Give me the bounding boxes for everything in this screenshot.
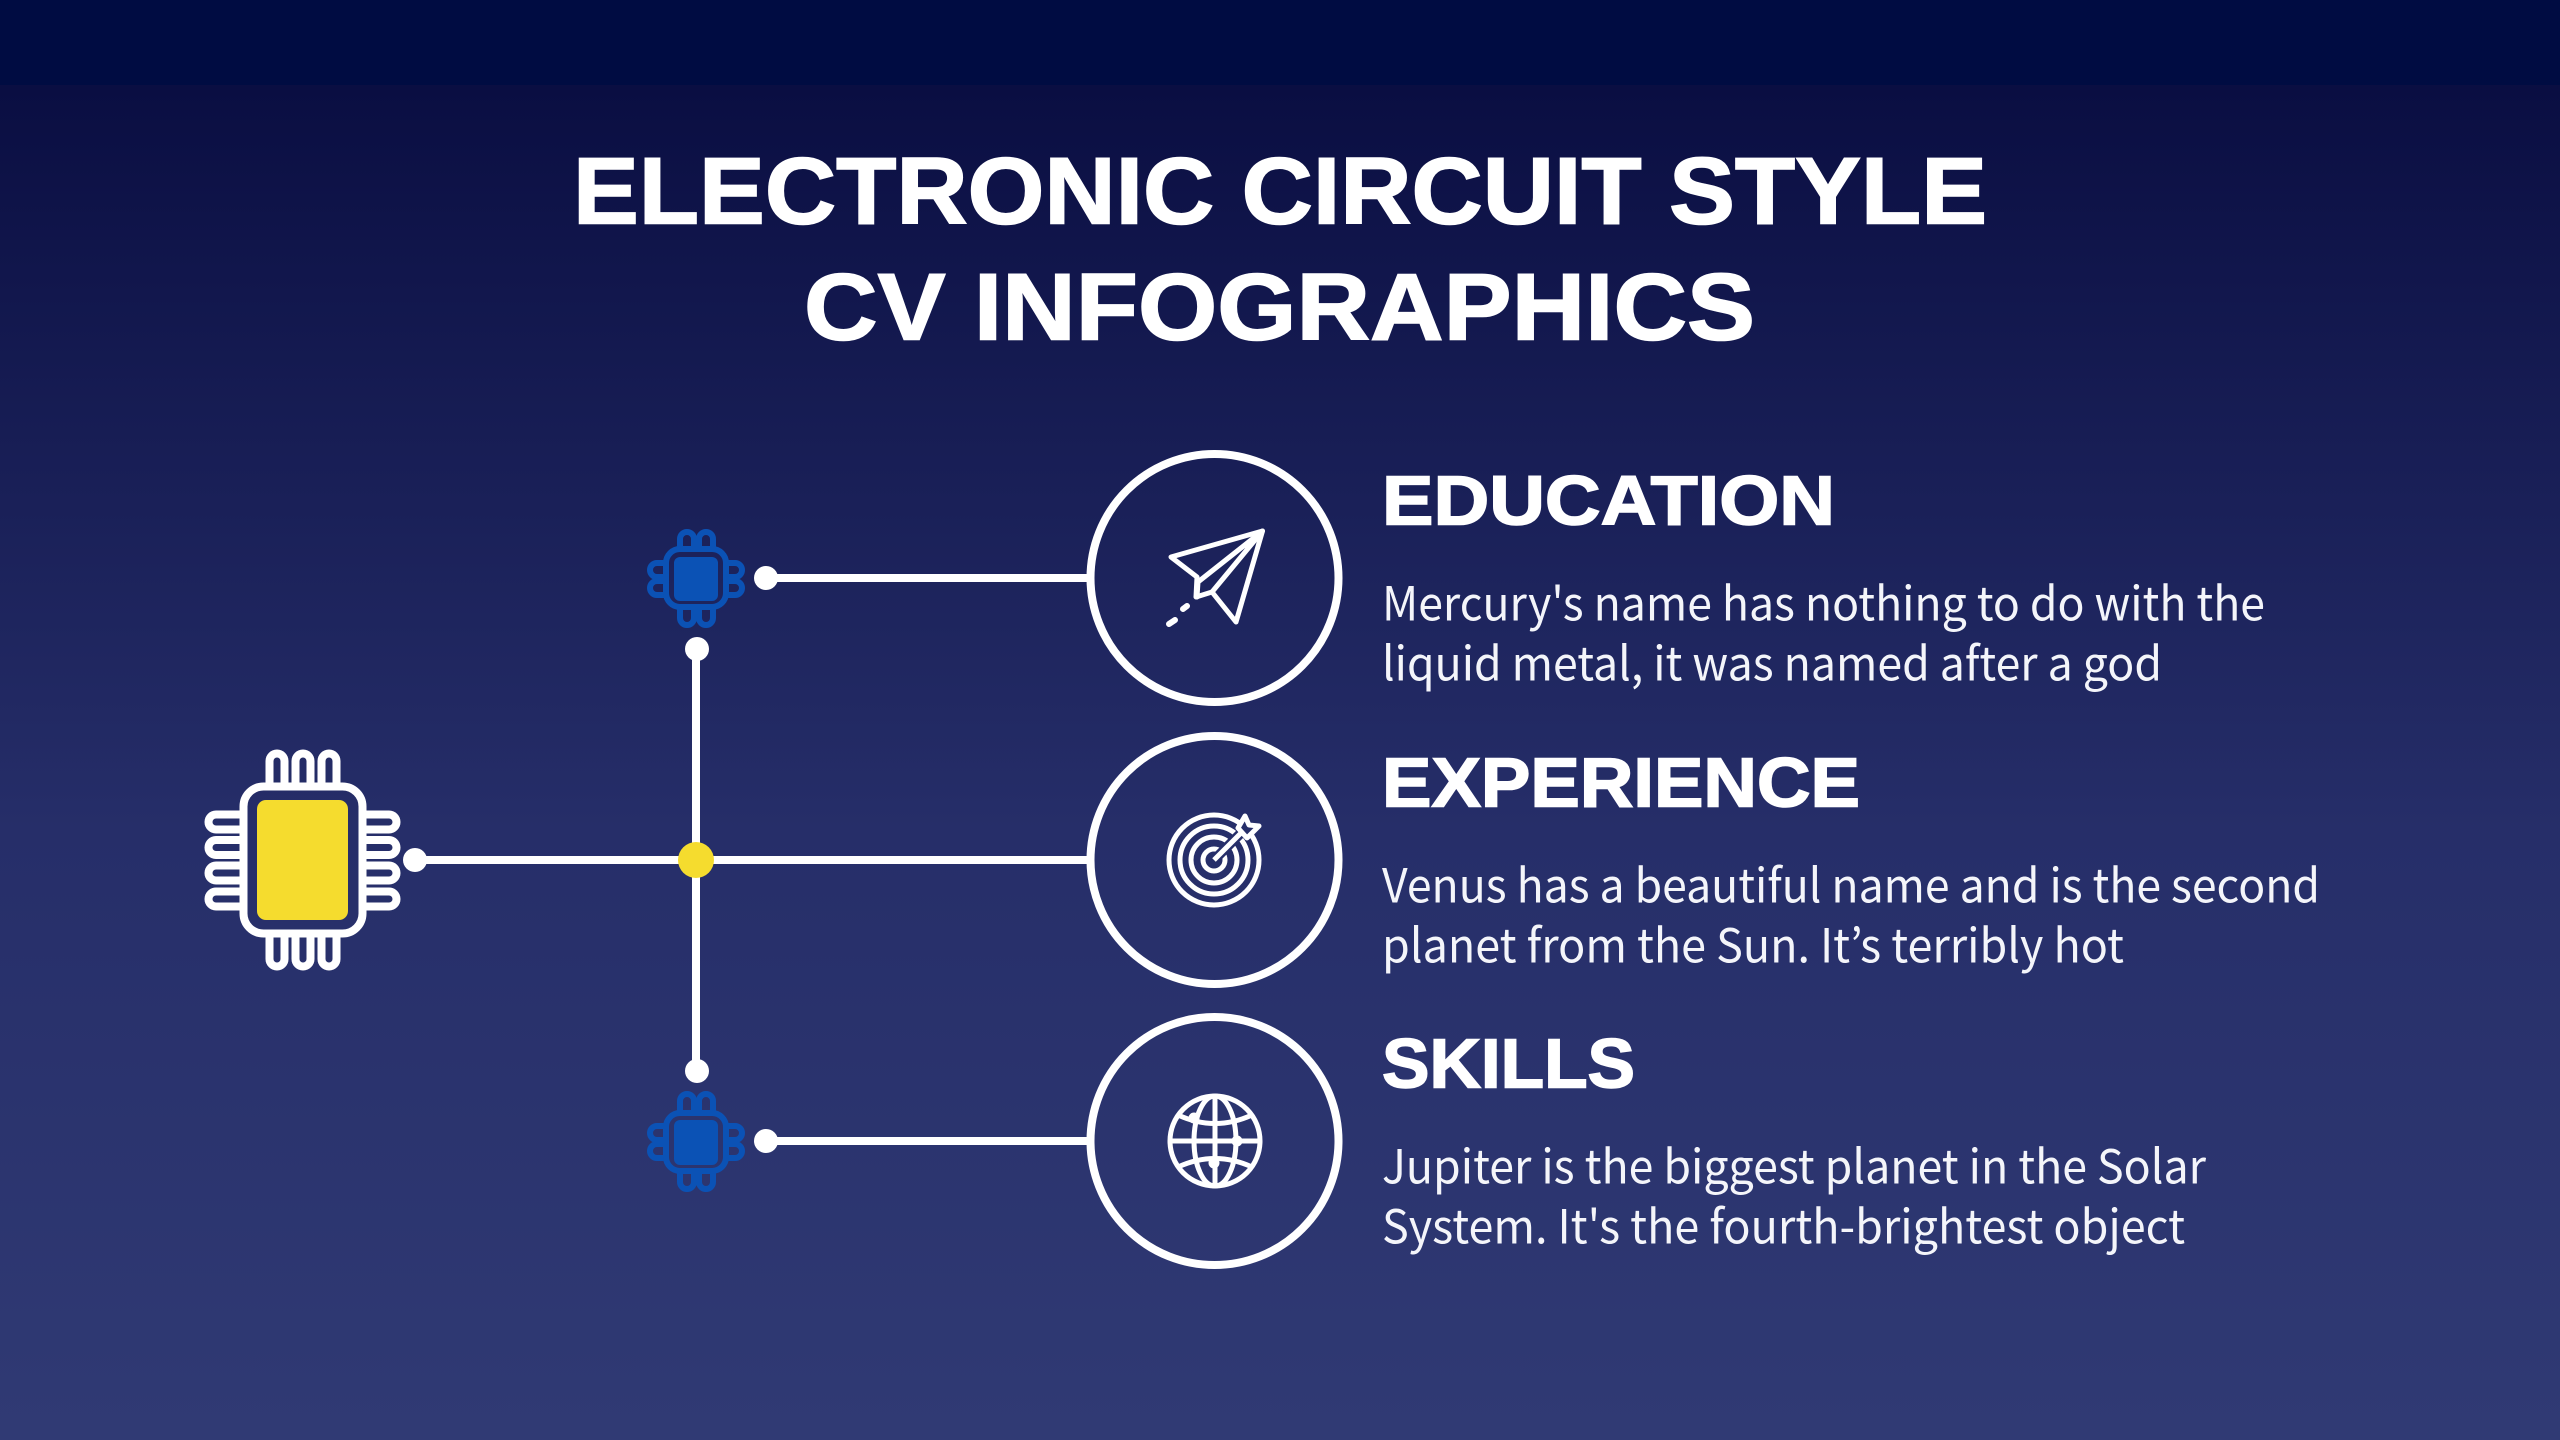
main chip icon [209, 754, 396, 966]
small chip icon: top [650, 532, 742, 625]
text block: education [1382, 462, 2265, 694]
text block: experience: EXPERIENCE [1382, 744, 1860, 822]
top band [0, 0, 2560, 85]
icon: globe [1170, 1096, 1260, 1186]
title: CV INFOGRAPHICS [804, 254, 1755, 360]
text block: experience: planet from the Sun. It’s terribly hot [1382, 908, 2124, 976]
text block: education: Mercury's name has nothing to do with the [1382, 566, 2265, 634]
text block: skills [1382, 1024, 2207, 1258]
small chip icon: bottom [650, 1094, 742, 1189]
circle: skills [1090, 1017, 1338, 1265]
title: ELECTRONIC CIRCUIT STYLE [573, 138, 1987, 244]
icon: paper plane [1169, 531, 1262, 624]
circle: education [1090, 454, 1338, 702]
text block: skills: SKILLS [1382, 1024, 1635, 1102]
text block: education: liquid metal, it was named after a god [1382, 626, 2162, 694]
icon: target [1169, 815, 1259, 905]
title [573, 138, 1987, 360]
text block: experience [1382, 744, 2320, 976]
text block: skills: Jupiter is the biggest planet in the Solar [1382, 1128, 2207, 1198]
text block: experience: Venus has a beautiful name and is the second [1382, 848, 2320, 916]
text block: education: EDUCATION [1382, 462, 1835, 540]
circuit connector lines [403, 566, 1090, 1153]
text block: skills: System. It's the fourth-brightest object [1382, 1188, 2185, 1258]
circle: experience [1090, 736, 1338, 984]
yellow junction node [678, 842, 714, 878]
